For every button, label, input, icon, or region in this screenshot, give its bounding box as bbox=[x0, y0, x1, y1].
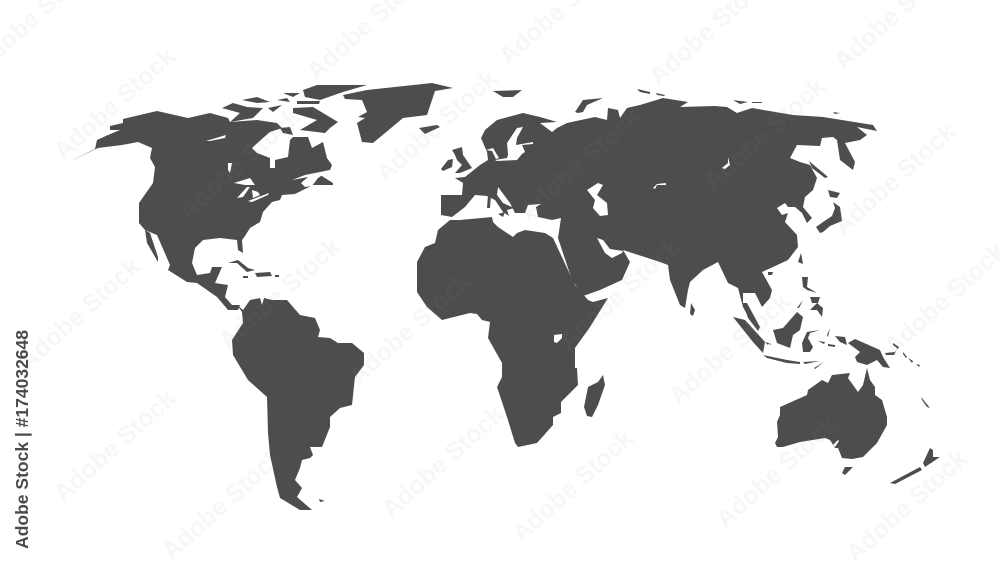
Adobe Stock watermarks: Adobe Stock bbox=[49, 384, 181, 508]
Adobe Stock watermarks: Adobe Stock bbox=[711, 410, 843, 534]
map: world silhouette bbox=[67, 83, 940, 510]
Caspian Sea bbox=[587, 183, 608, 216]
Adobe Stock watermarks: Adobe Stock bbox=[514, 102, 646, 226]
Adobe Stock watermarks: Adobe Stock bbox=[699, 72, 831, 196]
Caribbean islands bbox=[228, 260, 279, 278]
Lake Victoria bbox=[554, 334, 562, 343]
Iceland bbox=[419, 125, 440, 134]
Persian Gulf bbox=[597, 238, 623, 258]
Greenland bbox=[343, 83, 453, 143]
New Zealand bbox=[890, 448, 940, 484]
Adobe Stock watermarks: Adobe Stock bbox=[49, 42, 181, 166]
Adobe Stock watermarks: Adobe Stock bbox=[554, 232, 686, 356]
Bass notch, Australia bbox=[833, 440, 839, 447]
Adobe Stock watermarks: Adobe Stock bbox=[214, 232, 346, 356]
Gulf of St Lawrence bbox=[292, 170, 330, 187]
Adobe Stock watermarks: Adobe Stock bbox=[841, 444, 973, 566]
Australia bbox=[775, 368, 887, 459]
Lake Balkhash bbox=[653, 183, 666, 189]
Adobe Stock watermarks: Adobe Stock bbox=[664, 287, 796, 411]
Tasmania bbox=[842, 467, 853, 475]
Adobe Stock watermarks: Adobe Stock bbox=[371, 64, 503, 188]
Great Lakes bbox=[234, 178, 269, 202]
Adobe Stock watermarks: Adobe Stock bbox=[507, 424, 639, 548]
Baltic Sea bbox=[495, 127, 533, 161]
Philippines bbox=[797, 277, 823, 317]
Adobe Stock watermarks: Adobe Stock bbox=[14, 252, 146, 376]
Adobe Stock watermarks: Adobe Stock bbox=[829, 117, 961, 241]
stock credit text: Adobe Stock | #174032648 bbox=[12, 330, 32, 549]
Madagascar bbox=[584, 375, 605, 417]
Novaya Zemlya and arctic islands bbox=[493, 89, 840, 114]
Adobe Stock watermarks: Adobe Stock bbox=[174, 102, 306, 226]
North America bbox=[67, 85, 367, 310]
Canadian lakes bbox=[206, 135, 232, 173]
Adobe Stock watermarks: Adobe Stock bbox=[377, 400, 509, 524]
Taiwan, Hainan, Sri Lanka bbox=[690, 253, 803, 316]
Adobe Stock watermarks: Adobe Stock bbox=[157, 442, 289, 566]
New Guinea and Pacific islands bbox=[848, 339, 930, 408]
Aegean Sea bbox=[525, 204, 541, 217]
Lake Baikal bbox=[722, 157, 730, 169]
Indonesia bbox=[733, 312, 847, 369]
Africa bbox=[417, 217, 608, 447]
Eurasia bbox=[441, 89, 877, 369]
Skagerrak bbox=[486, 148, 499, 159]
Adobe Stock watermarks: Adobe Stock bbox=[344, 267, 476, 391]
Great Britain and Ireland bbox=[441, 147, 472, 173]
Japan and Sakhalin bbox=[809, 161, 842, 233]
Mediterranean islands bbox=[487, 195, 505, 217]
water bodies cut out of the land bbox=[206, 127, 839, 447]
South America bbox=[232, 298, 364, 510]
